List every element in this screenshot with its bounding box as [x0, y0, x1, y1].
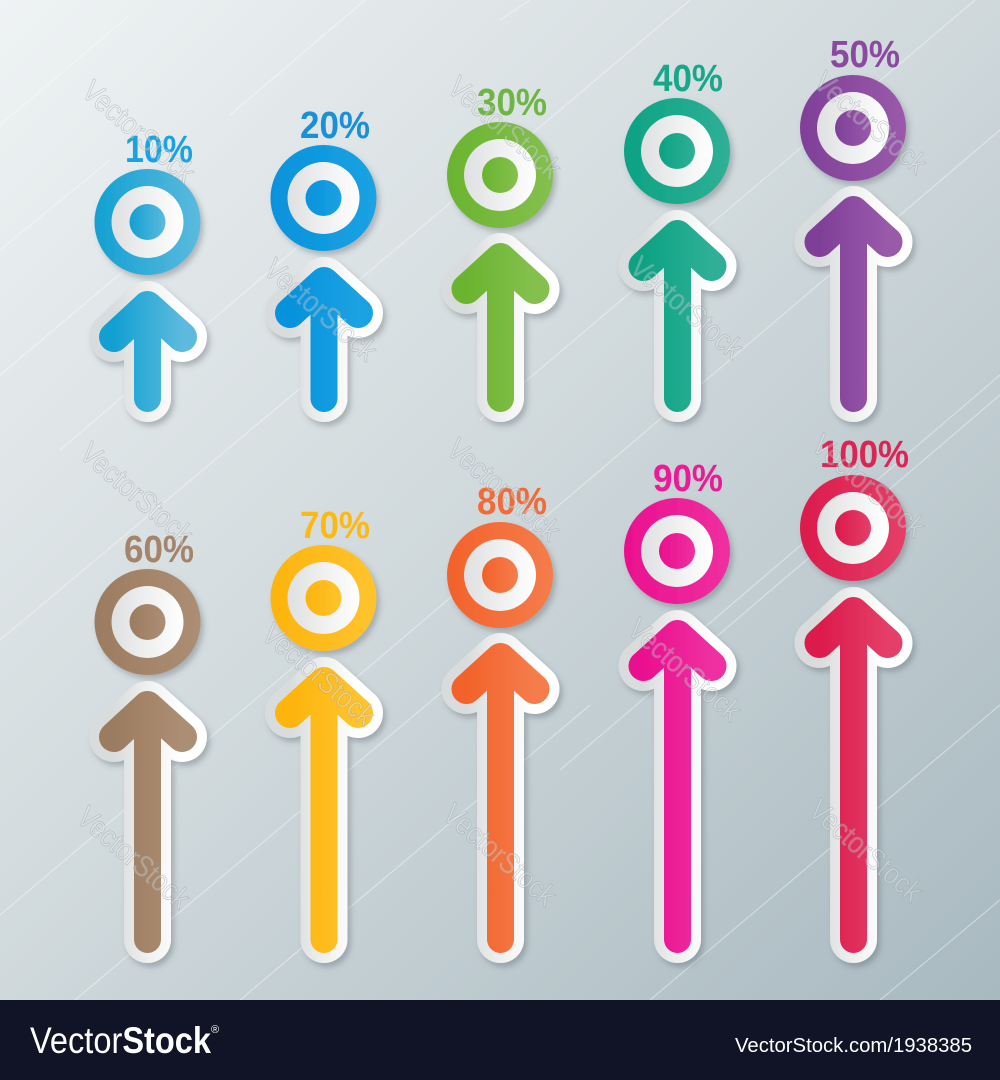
watermarks: VectorStock — [440, 432, 567, 548]
watermarks: VectorStock — [623, 250, 750, 366]
footer logo: VectorStock — [30, 1020, 211, 1061]
watermarks: VectorStock — [807, 65, 934, 181]
10% target — [94, 169, 200, 275]
40% arrow — [644, 235, 712, 398]
30% target — [447, 122, 553, 228]
100% arrow — [820, 612, 888, 940]
footer bar — [0, 1000, 1000, 1080]
footer id: VectorStock.com/1938385 — [735, 1035, 972, 1057]
watermarks: VectorStock — [436, 797, 563, 913]
50% target — [800, 75, 906, 181]
20% arrow — [290, 282, 358, 398]
60% target — [94, 569, 200, 675]
100% target — [800, 475, 906, 581]
watermarks: VectorStock — [73, 436, 200, 552]
70% arrow — [290, 682, 358, 940]
row 1 — [94, 34, 906, 398]
100% label: 100% — [820, 434, 909, 476]
70% target — [270, 545, 376, 651]
60% arrow — [114, 706, 182, 940]
row 2 — [94, 434, 909, 940]
30% label: 30% — [477, 82, 547, 124]
60% label: 60% — [124, 529, 194, 571]
80% target — [447, 522, 553, 628]
watermarks: VectorStock — [621, 612, 748, 728]
20% label: 20% — [300, 105, 370, 147]
watermarks: VectorStock — [70, 800, 197, 916]
10% label: 10% — [125, 129, 193, 171]
90% label: 90% — [653, 458, 723, 500]
90% target — [624, 498, 730, 604]
40% label: 40% — [653, 58, 723, 100]
30% arrow — [466, 258, 534, 398]
50% arrow — [820, 211, 888, 398]
70% label: 70% — [300, 505, 370, 547]
10% arrow — [114, 306, 182, 398]
watermarks: VectorStock — [441, 70, 568, 186]
20% target — [270, 145, 376, 251]
watermarks: VectorStock — [805, 428, 932, 544]
registered mark: ® — [211, 1024, 219, 1036]
40% target — [624, 98, 730, 204]
80% arrow — [466, 658, 534, 940]
watermarks: VectorStock — [257, 252, 384, 368]
watermarks: VectorStock — [255, 617, 382, 733]
50% label: 50% — [830, 34, 900, 76]
90% arrow — [644, 635, 712, 940]
80% label: 80% — [477, 481, 547, 523]
watermarks — [70, 65, 934, 916]
watermarks: VectorStock — [75, 74, 202, 190]
watermarks: VectorStock — [802, 793, 929, 909]
